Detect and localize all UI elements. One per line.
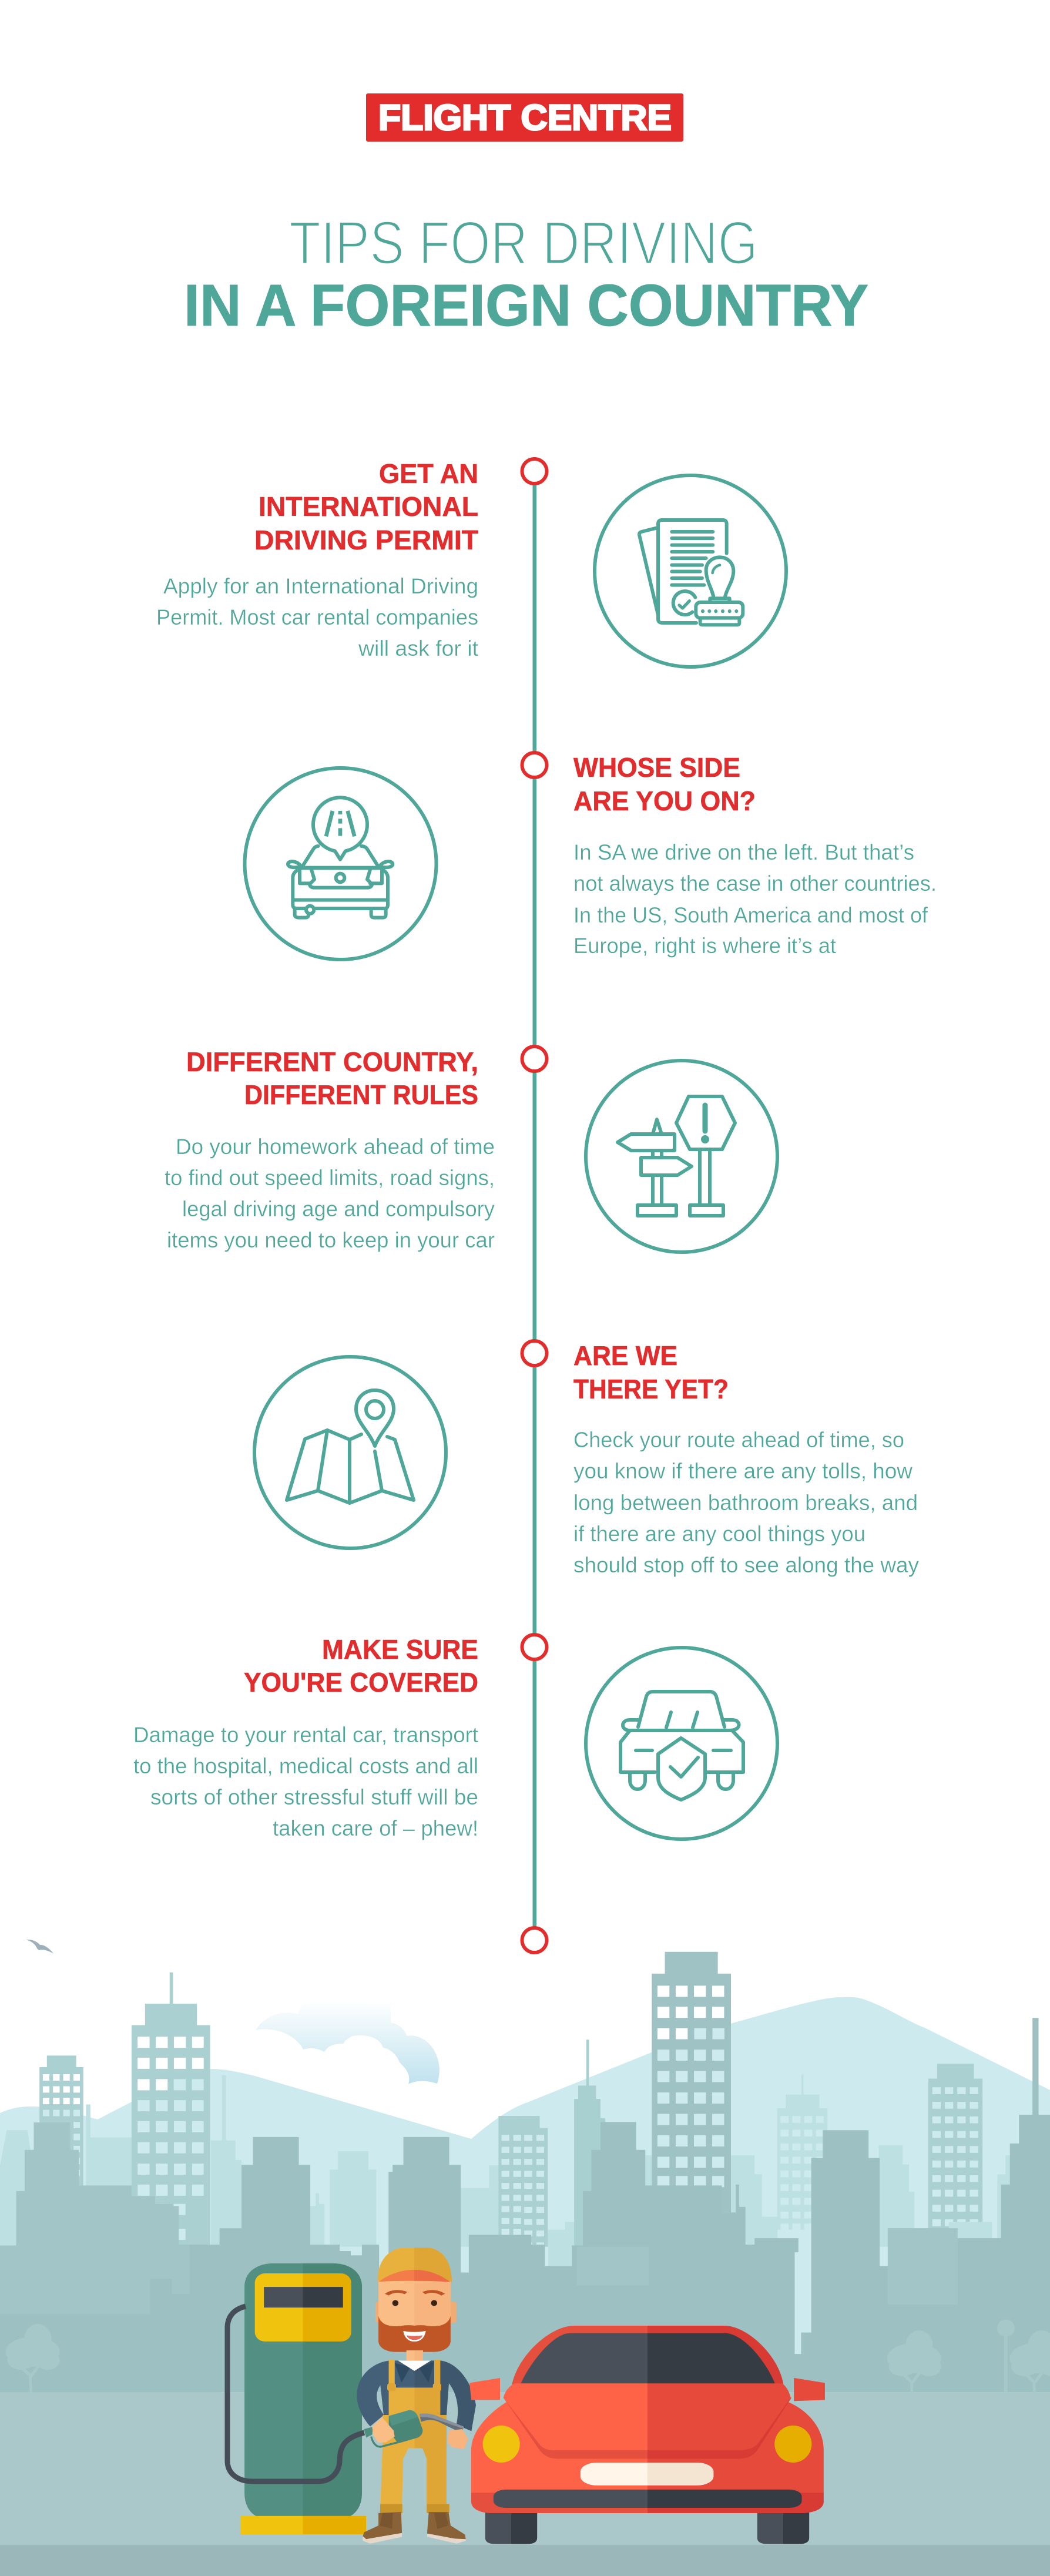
body text: In the US, South America and most of <box>573 903 928 927</box>
body text: Permit. Most car rental companies <box>156 605 478 629</box>
icon: map and pin <box>254 1357 446 1548</box>
body text: Europe, right is where it’s at <box>573 934 837 958</box>
hills <box>0 1997 1050 2409</box>
body text: items you need to keep in your car <box>167 1228 495 1252</box>
body text <box>156 574 479 660</box>
panel: get an international driving permit <box>156 458 786 667</box>
icon: permit and stamp <box>595 475 786 667</box>
icon: car and road pin <box>244 768 436 960</box>
heading: THERE YET? <box>573 1374 729 1404</box>
heading <box>186 1046 478 1110</box>
title <box>184 209 868 338</box>
illustration: red car <box>469 2326 825 2544</box>
heading <box>244 1634 478 1698</box>
illustration: attendant <box>357 2248 476 2544</box>
body text <box>165 1135 495 1252</box>
body text: legal driving age and compulsory <box>182 1197 495 1221</box>
heading: GET AN <box>379 458 478 489</box>
body text: long between bathroom breaks, and <box>573 1491 918 1515</box>
heading: INTERNATIONAL <box>259 491 478 522</box>
body text: to the hospital, medical costs and all <box>133 1754 478 1778</box>
body text: should stop off to see along the way <box>573 1553 919 1577</box>
heading: ARE WE <box>573 1340 677 1371</box>
timeline <box>522 459 546 1953</box>
body text <box>573 1428 919 1577</box>
ground <box>0 2393 1050 2545</box>
illustration: petrol pump <box>227 2263 366 2534</box>
body text: In SA we drive on the left. But that’s <box>573 840 914 864</box>
body text: Apply for an International Driving <box>163 574 478 598</box>
heading: DRIVING PERMIT <box>254 525 478 555</box>
heading: WHOSE SIDE <box>573 752 740 783</box>
body text: to find out speed limits, road signs, <box>165 1166 495 1190</box>
logo: Flight Centre: FLIGHT CENTRE <box>378 98 672 137</box>
heading: YOU'RE COVERED <box>244 1667 478 1698</box>
heading: MAKE SURE <box>322 1634 478 1665</box>
body text: not always the case in other countries. <box>573 871 937 895</box>
body text: sorts of other stressful stuff will be <box>150 1785 478 1809</box>
panel: are we there yet <box>254 1340 919 1577</box>
illustration: city skyline and ground <box>0 1940 1050 2576</box>
panel: different country, different rules <box>165 1046 777 1252</box>
body text: if there are any cool things you <box>573 1522 866 1546</box>
road <box>0 2545 1050 2576</box>
bird <box>26 1940 53 1954</box>
body text: taken care of – phew! <box>273 1816 478 1840</box>
icon: car and shield <box>586 1648 777 1839</box>
body text: Damage to your rental car, transport <box>133 1723 479 1747</box>
body text: you know if there are any tolls, how <box>573 1459 913 1483</box>
body text <box>573 840 937 958</box>
heading: DIFFERENT COUNTRY, <box>186 1046 478 1077</box>
heading: ARE YOU ON? <box>573 786 756 816</box>
icon: road signs <box>586 1061 777 1252</box>
heading <box>254 458 478 555</box>
heading <box>573 1340 729 1404</box>
body text: Do your homework ahead of time <box>176 1135 495 1159</box>
body text: will ask for it <box>358 636 479 660</box>
cloud <box>256 2001 440 2084</box>
right city <box>521 1952 1050 2399</box>
title: TIPS FOR DRIVING <box>289 209 758 277</box>
left city <box>0 1973 529 2393</box>
panel: whose side are you on <box>244 752 937 960</box>
body text <box>133 1723 479 1840</box>
heading: DIFFERENT RULES <box>244 1079 478 1110</box>
body text: Check your route ahead of time, so <box>573 1428 904 1452</box>
heading <box>573 752 756 816</box>
title: IN A FOREIGN COUNTRY <box>184 273 868 338</box>
panel: make sure you're covered <box>133 1634 777 1840</box>
